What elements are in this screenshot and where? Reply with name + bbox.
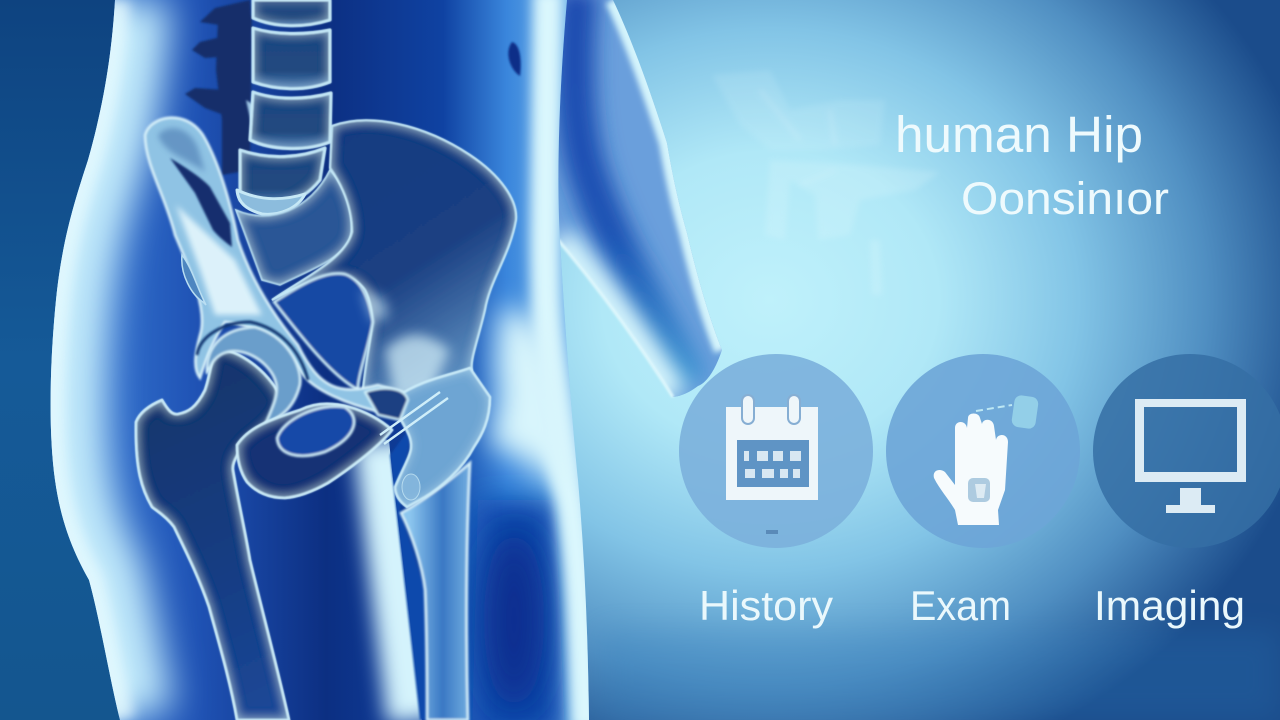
left edge glow <box>51 0 120 720</box>
lumbar spine <box>185 0 331 214</box>
right ilium <box>272 120 516 410</box>
obturator inner opening <box>274 273 373 390</box>
spinous processes <box>185 0 252 175</box>
arm <box>558 0 722 398</box>
right femur <box>401 463 470 720</box>
femur shaft <box>136 349 289 720</box>
icon: monitor <box>1135 399 1246 513</box>
bright pubic area highlight <box>385 335 450 400</box>
wing white highlight <box>176 205 262 315</box>
acetabulum arc <box>197 322 308 380</box>
circle: imaging <box>1093 354 1280 548</box>
ilium upper interior <box>158 128 205 172</box>
lesser trochanter lobe <box>237 404 392 498</box>
right leg dark area <box>472 500 565 720</box>
dark slit in ilium <box>170 158 232 247</box>
navel <box>508 42 521 76</box>
left ilium wing <box>145 118 402 412</box>
pale spinal bridge <box>246 100 272 140</box>
left femur <box>136 327 392 720</box>
label: Exam: Exam <box>910 582 1011 629</box>
vertebra blocks <box>253 0 330 26</box>
far side pelvis lobe <box>182 255 206 305</box>
lowest disc <box>237 190 305 214</box>
pubic bone and ischium <box>365 368 490 507</box>
heading line 2: Oonsinıor <box>961 173 1169 224</box>
femoral head <box>207 327 300 425</box>
faint ghost anatomy watermark <box>712 70 940 295</box>
torso and legs silhouette <box>50 0 589 720</box>
icon: calendar <box>726 395 818 500</box>
right hip glow <box>488 309 578 490</box>
circle: history <box>679 354 873 548</box>
icon: hand <box>934 414 1008 525</box>
femur neck ellipse opening <box>277 406 354 456</box>
right edge glow <box>545 0 586 720</box>
label: Imaging: Imaging <box>1094 582 1245 629</box>
circle: exam <box>886 354 1080 548</box>
bright thigh band <box>389 440 422 720</box>
heading <box>895 106 1169 224</box>
heading line 1: human Hip <box>895 106 1143 163</box>
label: History: History <box>699 582 833 629</box>
gap between thigh band and right femur <box>390 425 427 720</box>
icon: handheld scanner <box>976 394 1039 430</box>
sacrum <box>236 170 352 285</box>
